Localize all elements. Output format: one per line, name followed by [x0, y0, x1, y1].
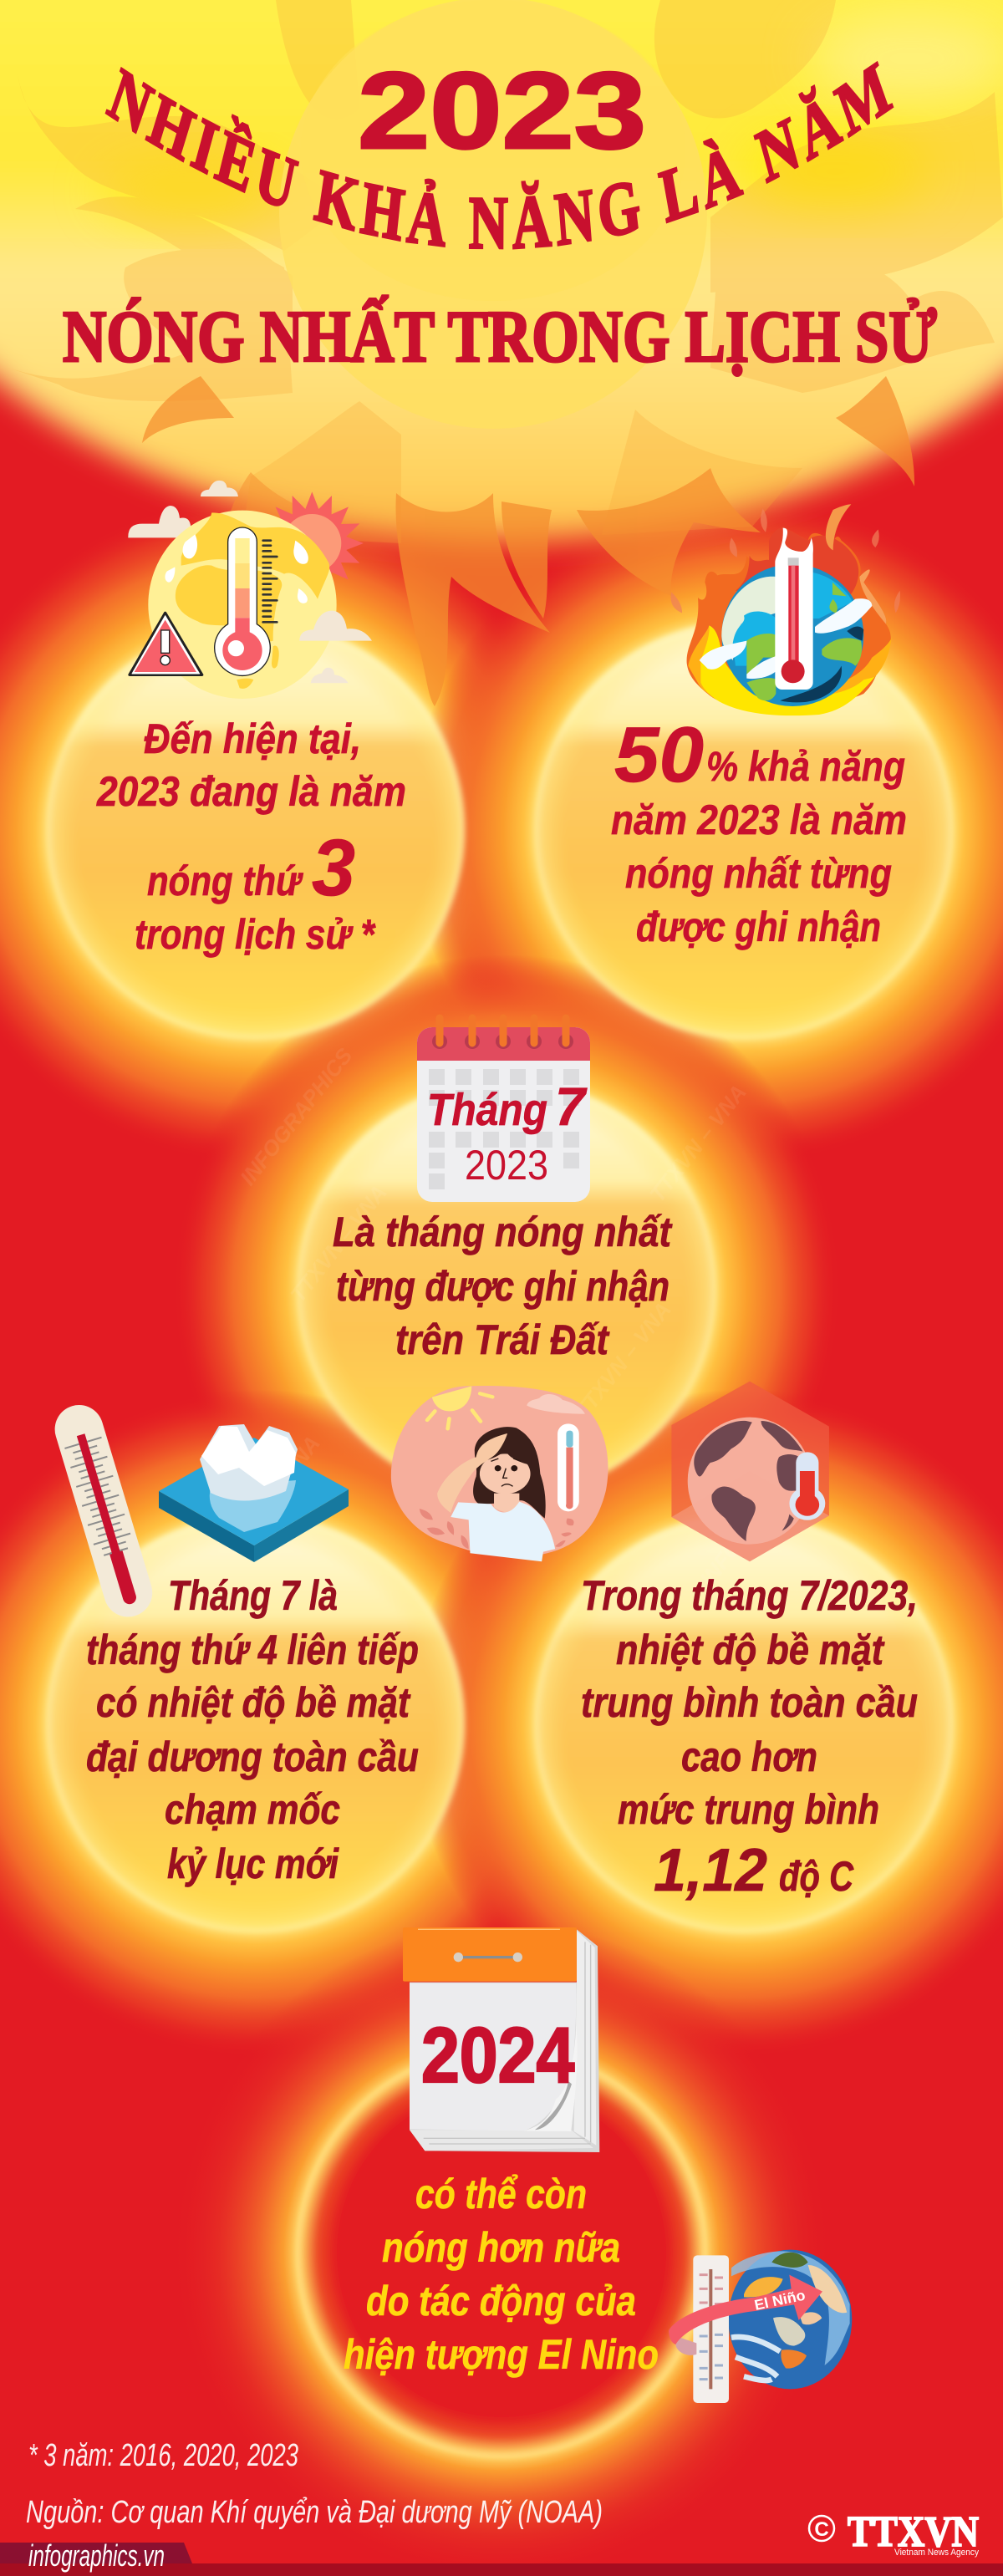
footer bar: infographics.vn [28, 2538, 165, 2573]
text: orb 5: độ C [779, 1853, 854, 1900]
title: arc line: NHIỀU KHẢ NĂNG LÀ NĂM [105, 60, 894, 249]
text: orb 4: đại dương toàn cầu [86, 1733, 419, 1780]
text: orb 1: 2023 đang là năm [96, 768, 406, 815]
icon: burning earth with thermometer [671, 504, 900, 715]
text: orb 5: Trong tháng 7/2023, [581, 1572, 918, 1619]
text: orb 1: nóng thứ [147, 858, 304, 904]
text: orb 2: nóng nhất từng [625, 850, 892, 897]
text: orb 3: Là tháng nóng nhất [333, 1209, 673, 1255]
text: orb 2: năm 2023 là năm [611, 797, 907, 843]
text: orb 4: tháng thứ 4 liên tiếp [86, 1627, 419, 1673]
text: orb 2: được ghi nhận [636, 904, 881, 950]
text: orb 6: do tác động của [366, 2278, 636, 2324]
text: orb 2 [611, 710, 907, 950]
text: orb 1 [96, 715, 406, 958]
text: orb 1: Đến hiện tại, [144, 715, 361, 762]
icon: calendar July 2023 [417, 1018, 590, 1202]
icon: long thermometer [48, 1399, 158, 1623]
text: orb 4: Tháng 7 là [168, 1572, 338, 1619]
icon: tear-off calendar 2024: 2024 [421, 2011, 574, 2099]
icon: El Nino globe and thermometer: El Niño [753, 2287, 807, 2314]
text: orb 5: nhiệt độ bề mặt [616, 1627, 885, 1673]
text: orb 3: từng được ghi nhận [336, 1263, 670, 1310]
logo: TTXVN: TTXVN [848, 2508, 979, 2556]
text: orb 6 [344, 2171, 659, 2378]
text: orb 5: mức trung bình [618, 1786, 879, 1833]
sun [0, 0, 1003, 706]
icon: woman feeling hot [391, 1386, 608, 1561]
icon: El Nino globe and thermometer [669, 2250, 852, 2403]
text: orb 5: trung bình toàn cầu [581, 1679, 918, 1726]
text: orb 4 [86, 1572, 419, 1887]
text: orb 3: trên Trái Đất [395, 1316, 610, 1363]
watermarks: TTXVN – VNA [285, 1180, 392, 1307]
footer bar [0, 2538, 1003, 2576]
watermarks: TTXVN – VNA [218, 1431, 325, 1558]
text: orb 4: kỷ lục mới [167, 1840, 339, 1887]
text: orb 4: có nhiệt độ bề mặt [96, 1679, 411, 1726]
text: orb 2: 50 [614, 710, 704, 798]
logo: TTXVN: C [814, 2518, 829, 2541]
icon: globe in hexagon [671, 1382, 829, 1561]
source: Nguồn: Cơ quan Khí quyển và Đại dương Mỹ (NOAA) [26, 2495, 603, 2530]
watermarks: INFOGRAPHICS [235, 1043, 358, 1190]
orb discs [47, 621, 953, 2457]
text: orb 6: nóng hơn nữa [382, 2224, 620, 2271]
text: orb 3 [333, 1209, 673, 1363]
text: orb 5: cao hơn [681, 1733, 817, 1780]
text: orb 6: có thể còn [415, 2171, 587, 2217]
icon: calendar July 2023: 2023 [465, 1142, 548, 1189]
icon: calendar July 2023: Tháng [427, 1085, 547, 1135]
icon: calendar July 2023: 7 [555, 1077, 588, 1137]
text: orb 2: % khả năng [706, 743, 905, 790]
logo: TTXVN: Vietnam News Agency [894, 2548, 979, 2558]
icon: thermometer with sun and warning [128, 481, 372, 699]
text: orb 5: 1,12 [654, 1837, 767, 1904]
watermarks: TTXVN – VNA [644, 1080, 751, 1207]
logo: TTXVN [809, 2508, 979, 2558]
footnote: * 3 năm: 2016, 2020, 2023 [28, 2438, 298, 2473]
title: 2023: 2023 [358, 49, 646, 171]
watermarks [218, 1043, 817, 1591]
icon: tear-off calendar 2024 [403, 1927, 599, 2152]
icon: iceberg block [159, 1424, 349, 1562]
text: orb 5 [581, 1572, 918, 1904]
text: orb 1: 3 [312, 823, 355, 913]
text: orb 4: chạm mốc [165, 1786, 340, 1833]
watermarks: TTXVN – VNA [569, 1297, 676, 1424]
text: orb 6: hiện tượng El Nino [344, 2331, 659, 2378]
text: orb 1: trong lịch sử * [135, 911, 376, 958]
watermarks: INFOGRAPHICS [695, 1444, 817, 1591]
